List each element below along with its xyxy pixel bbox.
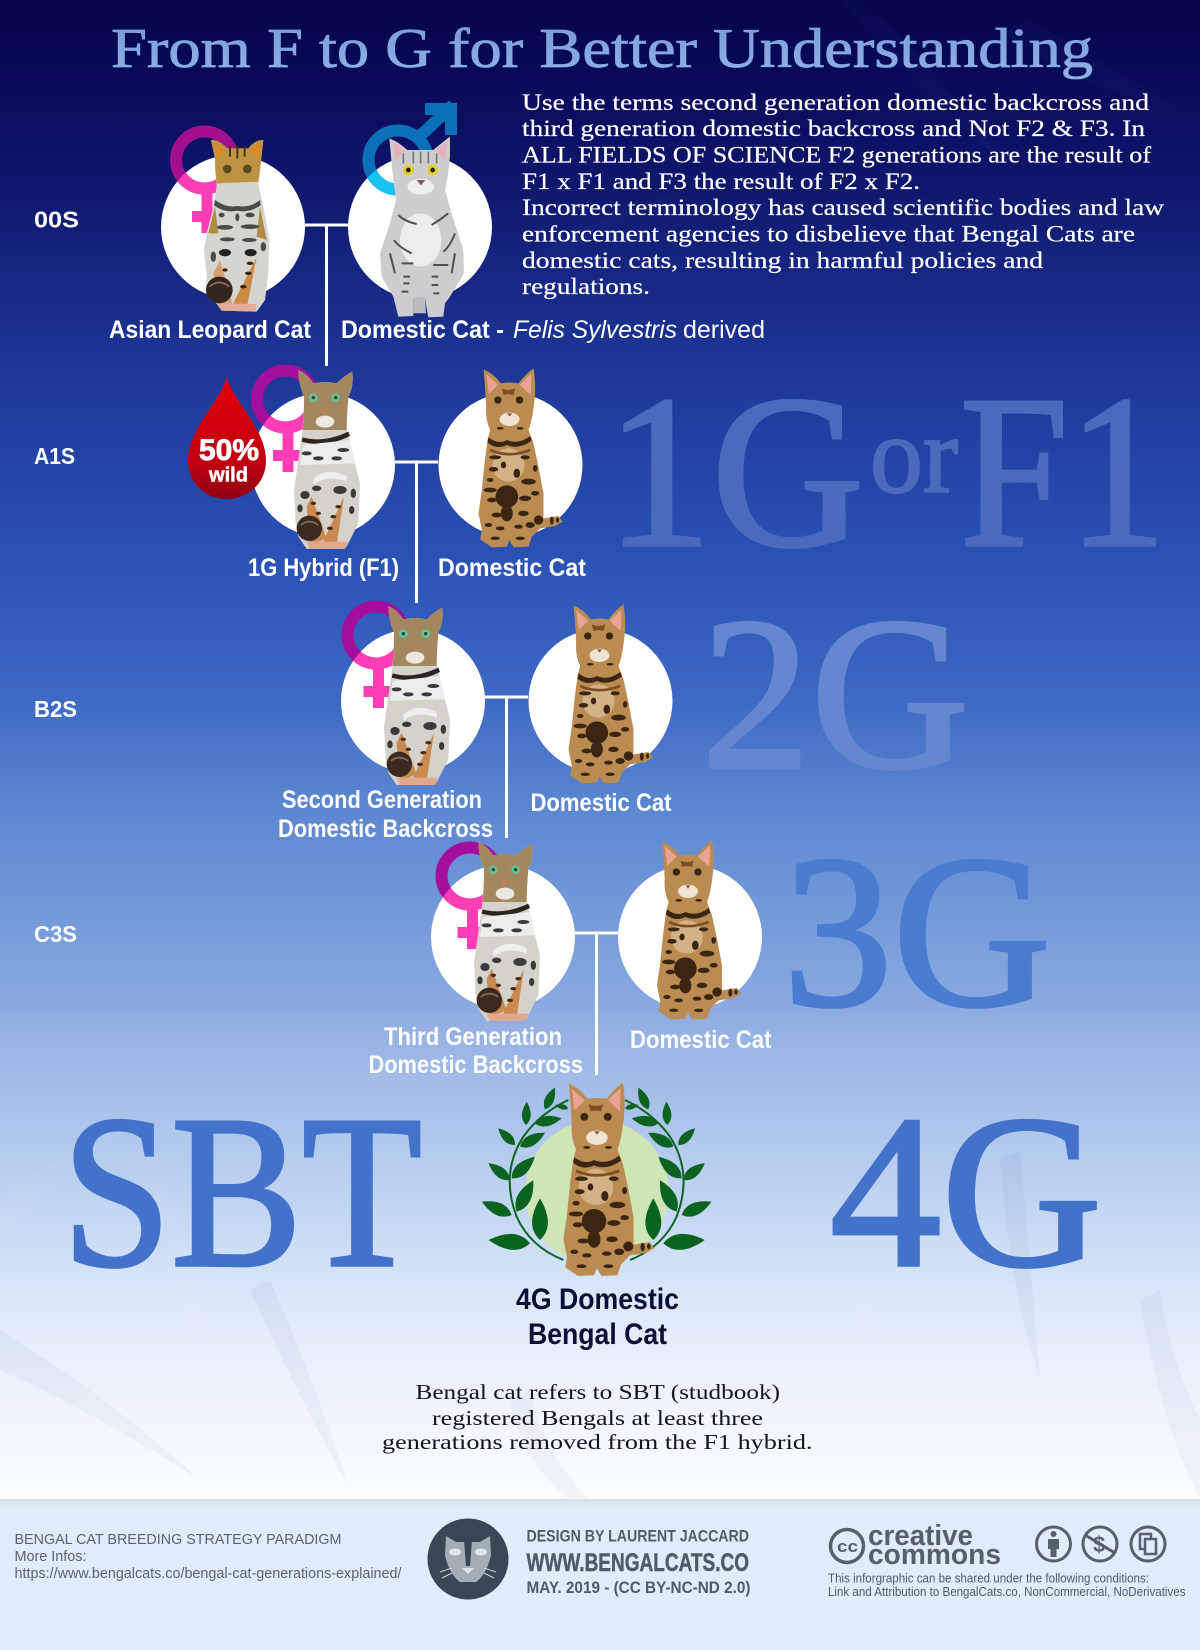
cat: third generation — [474, 842, 540, 1021]
footer: source text: BENGAL CAT BREEDING STRATEGY PARADIGM — [14, 1531, 342, 1548]
label: Second Generation Domestic Backcross: Domestic Backcross — [278, 815, 493, 843]
cat: Bengal domestic — [569, 604, 653, 783]
female parent circle — [161, 155, 305, 299]
female symbol — [257, 370, 314, 472]
closing note: generations removed from the F1 hybrid. — [382, 1430, 812, 1454]
blood drop: 50% wild — [188, 377, 266, 499]
intro paragraph: domestic cats, resulting in harmful policies and — [522, 248, 1044, 273]
cat: second generation — [384, 606, 450, 785]
footer: design credit: WWW.BENGALCATS.CO — [526, 1549, 749, 1577]
footer: design credit: MAY. 2019 - (CC BY-NC-ND 2.0) — [526, 1578, 750, 1597]
domestic circle — [528, 629, 672, 773]
intro paragraph — [522, 90, 1164, 299]
footer band — [0, 1499, 1200, 1650]
label: Domestic Cat: Domestic Cat — [530, 789, 672, 817]
intro paragraph: regulations. — [522, 274, 650, 299]
watermark: 3G: 3G — [783, 812, 1051, 1053]
label: Domestic Cat: Domestic Cat — [438, 554, 587, 582]
row 0: founding pair — [109, 105, 765, 344]
footer: source text: https://www.bengalcats.co/bengal-cat-generations-explained/ — [14, 1565, 402, 1582]
label: Second Generation Domestic Backcross — [278, 786, 493, 843]
footer: license text: This inforgraphic can be shared under the following conditions: — [828, 1572, 1149, 1586]
watermark: 4G: 4G — [830, 1072, 1102, 1313]
footer: creative commons logo: creative — [868, 1520, 973, 1552]
label: Third Generation Domestic Backcross: Domestic Backcross — [368, 1051, 583, 1079]
watermark: 1G or F1: 1G — [606, 352, 864, 593]
intro paragraph: Incorrect terminology has caused scientific bodies and law — [522, 195, 1164, 220]
label: Third Generation Domestic Backcross: Third Generation — [384, 1023, 562, 1051]
footer: license text — [828, 1572, 1186, 1599]
footer: design credit — [526, 1526, 750, 1597]
cat: Asian Leopard Cat — [204, 140, 269, 312]
watermark: 1G or F1 — [606, 352, 1166, 593]
footer: source text — [14, 1531, 402, 1582]
row label A1S: A1S — [34, 443, 75, 469]
label: Third Generation Domestic Backcross — [368, 1023, 583, 1079]
label: Second Generation Domestic Backcross: Second Generation — [282, 786, 482, 814]
closing note: Bengal cat refers to SBT (studbook) — [416, 1380, 780, 1404]
footer: source text: More Infos: — [14, 1548, 86, 1565]
footer: no-derivatives icon — [1131, 1527, 1165, 1561]
closing note — [382, 1380, 812, 1454]
blood drop: 50% wild: 50% — [199, 434, 259, 467]
row 3: third generation pair — [368, 840, 772, 1079]
footer: creative commons logo — [830, 1520, 1001, 1571]
row label B2S: B2S — [34, 696, 77, 722]
watermark: 2G: 2G — [701, 574, 969, 815]
female symbol — [348, 606, 404, 708]
footer: attribution icon — [1036, 1527, 1070, 1561]
row 1: 1G hybrid pair — [188, 368, 587, 582]
label: Domestic Cat - Felis Sylvestris derived: Domestic Cat - — [341, 316, 504, 344]
label: 4G Domestic Bengal Cat: 4G Domestic — [516, 1283, 679, 1316]
intro paragraph: ALL FIELDS OF SCIENCE F2 generations are the result of — [522, 142, 1151, 168]
female symbol — [176, 132, 233, 233]
footer: design credit: DESIGN BY LAURENT JACCARD — [526, 1526, 749, 1546]
footer: creative commons logo: commons — [868, 1539, 1001, 1571]
green disc — [525, 1120, 669, 1264]
label: 1G Hybrid (F1): 1G Hybrid (F1) — [248, 554, 399, 582]
cat: 1G hybrid — [294, 370, 360, 549]
watermark: SBT: SBT — [62, 1072, 422, 1313]
label: Asian Leopard Cat: Asian Leopard Cat — [109, 316, 312, 344]
cat: 4G Domestic Bengal — [563, 1083, 655, 1276]
female circle — [431, 865, 575, 1009]
label: 4G Domestic Bengal Cat — [516, 1283, 679, 1351]
row 2: second generation pair — [278, 604, 672, 843]
row label C3S: C3S — [34, 921, 77, 947]
label: Domestic Cat - Felis Sylvestris derived: Felis Sylvestris — [513, 316, 677, 344]
title: From F to G for Better Understanding — [111, 18, 1093, 80]
closing note: registered Bengals at least three — [432, 1406, 763, 1430]
laurel wreath — [479, 1086, 714, 1260]
row label 00S: 00S — [34, 206, 79, 232]
domestic circle — [438, 393, 582, 537]
footer: cat logo — [428, 1518, 508, 1600]
label: Domestic Cat - Felis Sylvestris derived: derived — [683, 316, 765, 344]
connector lines — [305, 225, 618, 1075]
cat: Bengal domestic — [657, 840, 741, 1019]
blood drop: 50% wild: wild — [208, 464, 248, 486]
label: Domestic Cat - Felis Sylvestris derived — [341, 316, 765, 344]
male parent circle — [348, 155, 492, 299]
watermark: 1G or F1: F1 — [960, 352, 1166, 593]
intro paragraph: F1 x F1 and F3 the result of F2 x F2. — [522, 169, 920, 194]
intro paragraph: third generation domestic backcross and Not F2 & F3. In — [522, 116, 1146, 141]
cat: silver Domestic Cat — [380, 137, 464, 317]
intro paragraph: enforcement agencies to disbelieve that Bengal Cats are — [522, 222, 1135, 246]
intro paragraph: Use the terms second generation domestic backcross and — [522, 90, 1150, 115]
laurel emblem with 4G Bengal cat — [479, 1083, 714, 1276]
watermark: 1G or F1: or — [870, 394, 958, 516]
label: 4G Domestic Bengal Cat: Bengal Cat — [528, 1318, 667, 1351]
domestic circle — [618, 865, 762, 1009]
female circle — [341, 629, 485, 773]
footer: non-commercial icon: $ — [1093, 1532, 1105, 1557]
footer: creative commons logo: cc — [837, 1537, 858, 1556]
cat: Bengal domestic — [479, 368, 563, 547]
female symbol — [442, 848, 498, 949]
footer: non-commercial icon — [1083, 1527, 1117, 1561]
label: Domestic Cat: Domestic Cat — [630, 1026, 772, 1054]
male symbol — [368, 105, 453, 190]
female circle — [251, 393, 395, 537]
